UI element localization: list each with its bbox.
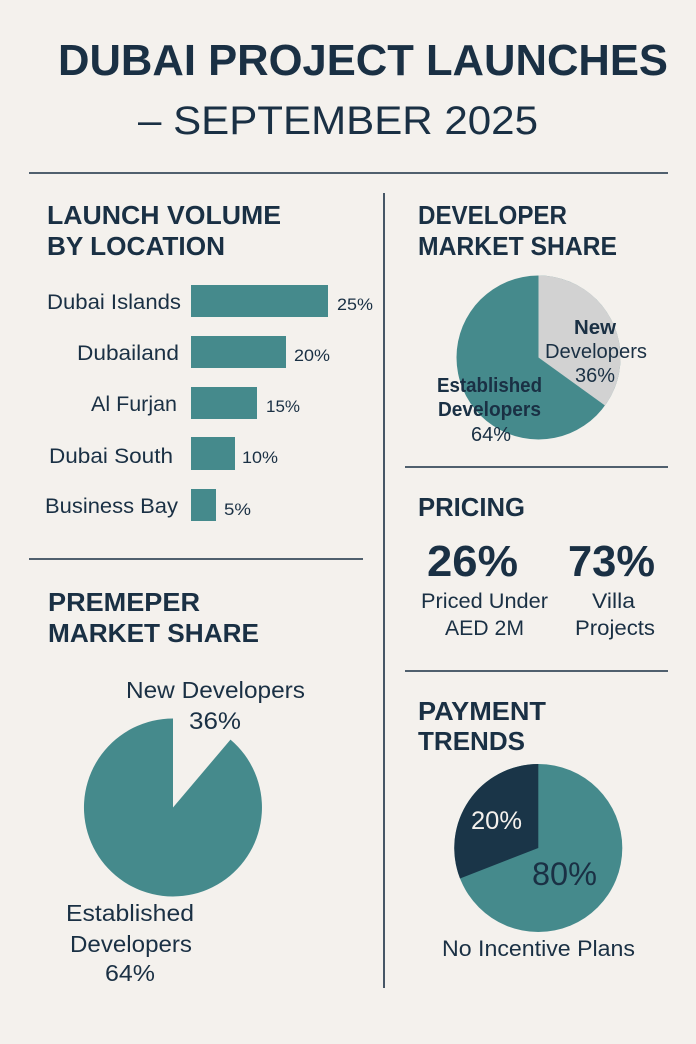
stat: priced under AED 2M: AED 2M (445, 617, 524, 640)
label: established developers (437, 375, 542, 446)
heading: launch volume (47, 200, 281, 261)
panel: pricing (418, 492, 655, 640)
label: established developers: 64% (471, 424, 511, 446)
heading: payment trends: TRENDS (418, 726, 525, 756)
label: new developers (126, 677, 305, 735)
stat: priced under AED 2M: Priced Under (421, 590, 548, 613)
bar chart: 25% (337, 295, 373, 314)
heading: premeper market share (48, 587, 259, 648)
label: new developers: 36% (189, 708, 241, 735)
heading: launch volume: LAUNCH VOLUME (47, 200, 281, 230)
bar chart: 15% (266, 397, 300, 416)
label: established developers: Established (66, 900, 194, 926)
label: established developers: Developers (438, 399, 541, 421)
heading: payment trends (418, 696, 546, 756)
panel: premeper market share (48, 587, 305, 986)
label: established developers: Developers (70, 931, 192, 957)
bar chart: Dubailand (77, 342, 179, 365)
panel: launch volume by location (45, 200, 373, 521)
title: DUBAI PROJECT LAUNCHES (58, 36, 668, 85)
stat: villa projects (568, 537, 655, 640)
bar chart: Dubai South (49, 445, 173, 468)
bar chart: 10% (242, 448, 278, 467)
heading: payment trends: PAYMENT (418, 696, 546, 726)
bar chart (45, 285, 373, 521)
heading: launch volume: BY LOCATION (47, 231, 225, 261)
pie chart: developer share (456, 276, 621, 440)
label: established developers (66, 900, 194, 986)
bar chart: Dubai Islands (47, 291, 181, 314)
stat: villa projects: Projects (575, 617, 655, 640)
label: new developers (545, 317, 647, 387)
label: new developers: New Developers (126, 677, 305, 703)
label: new developers: New (574, 317, 616, 339)
label: new developers: 36% (575, 365, 615, 387)
bar chart: 5% (224, 500, 251, 519)
heading: pricing: PRICING (418, 492, 525, 522)
label: 80 percent: 80% (532, 856, 597, 892)
caption: no incentive plans: No Incentive Plans (442, 936, 635, 961)
bar chart: 20% (294, 346, 330, 365)
pie chart: payment plans (454, 764, 622, 932)
heading: developer market share: DEVELOPER (418, 200, 567, 230)
stat: priced under AED 2M (421, 537, 548, 640)
pie chart: notched market share (84, 718, 262, 896)
label: established developers: Established (437, 375, 542, 397)
bar chart: Business Bay (45, 495, 179, 518)
label: 20 percent: 20% (471, 807, 522, 835)
heading: developer market share (418, 200, 617, 261)
label: established developers: 64% (105, 960, 155, 986)
title: – SEPTEMBER 2025 (138, 99, 538, 143)
heading: developer market share: MARKET SHARE (418, 231, 617, 261)
heading: premeper market share: PREMEPER (48, 587, 200, 617)
panel: developer market share (418, 200, 647, 446)
heading: premeper market share: MARKET SHARE (48, 618, 259, 648)
label: new developers: Developers (545, 341, 647, 363)
stat: priced under AED 2M: 26% (427, 537, 518, 586)
bar chart: Al Furjan (91, 393, 177, 416)
stat: villa projects: 73% (568, 537, 655, 586)
title (58, 36, 668, 143)
stat: villa projects: Villa (592, 590, 635, 613)
panel: payment trends (418, 696, 635, 961)
